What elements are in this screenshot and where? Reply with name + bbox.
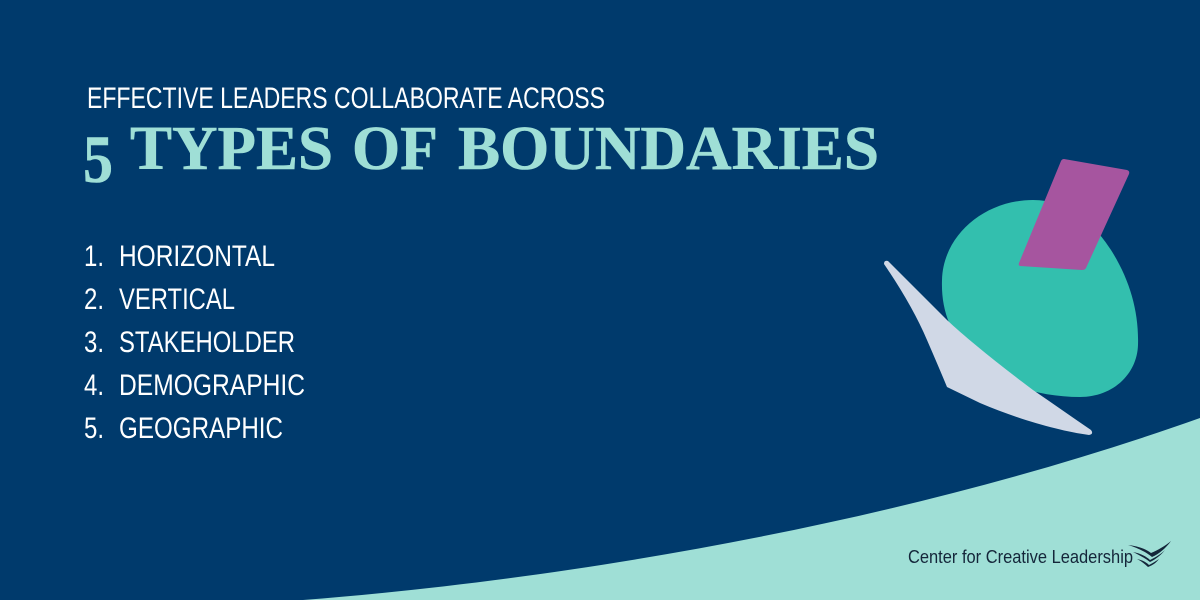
numbered list of boundaries: GEOGRAPHIC (119, 412, 283, 445)
subtitle: EFFECTIVE LEADERS COLLABORATE ACROSS (87, 82, 605, 115)
numbered list of boundaries: 1. (84, 240, 104, 273)
numbered list of boundaries: 5. (84, 412, 104, 445)
grey shard (884, 261, 1092, 435)
numbered list of boundaries: 4. (84, 369, 104, 402)
teal blob (942, 200, 1138, 397)
logo: Center for Creative Leadership: Center for Creative Leadership (908, 546, 1133, 567)
title: BOUNDARIES (458, 115, 879, 183)
numbered list of boundaries: STAKEHOLDER (119, 326, 295, 359)
icon: wings (1128, 541, 1171, 567)
numbered list of boundaries: HORIZONTAL (119, 240, 275, 273)
numbered list of boundaries: 3. (84, 326, 104, 359)
title: TYPES (130, 115, 333, 183)
numbered list of boundaries (84, 240, 305, 445)
title (83, 115, 879, 197)
purple parallelogram (1019, 159, 1129, 270)
title: OF (352, 115, 438, 183)
numbered list of boundaries: VERTICAL (119, 283, 235, 316)
numbered list of boundaries: 2. (84, 283, 104, 316)
mint curved footer band (303, 418, 1200, 600)
title: 5 (83, 121, 113, 197)
numbered list of boundaries: DEMOGRAPHIC (119, 369, 305, 402)
abstract shapes illustration (884, 159, 1138, 435)
